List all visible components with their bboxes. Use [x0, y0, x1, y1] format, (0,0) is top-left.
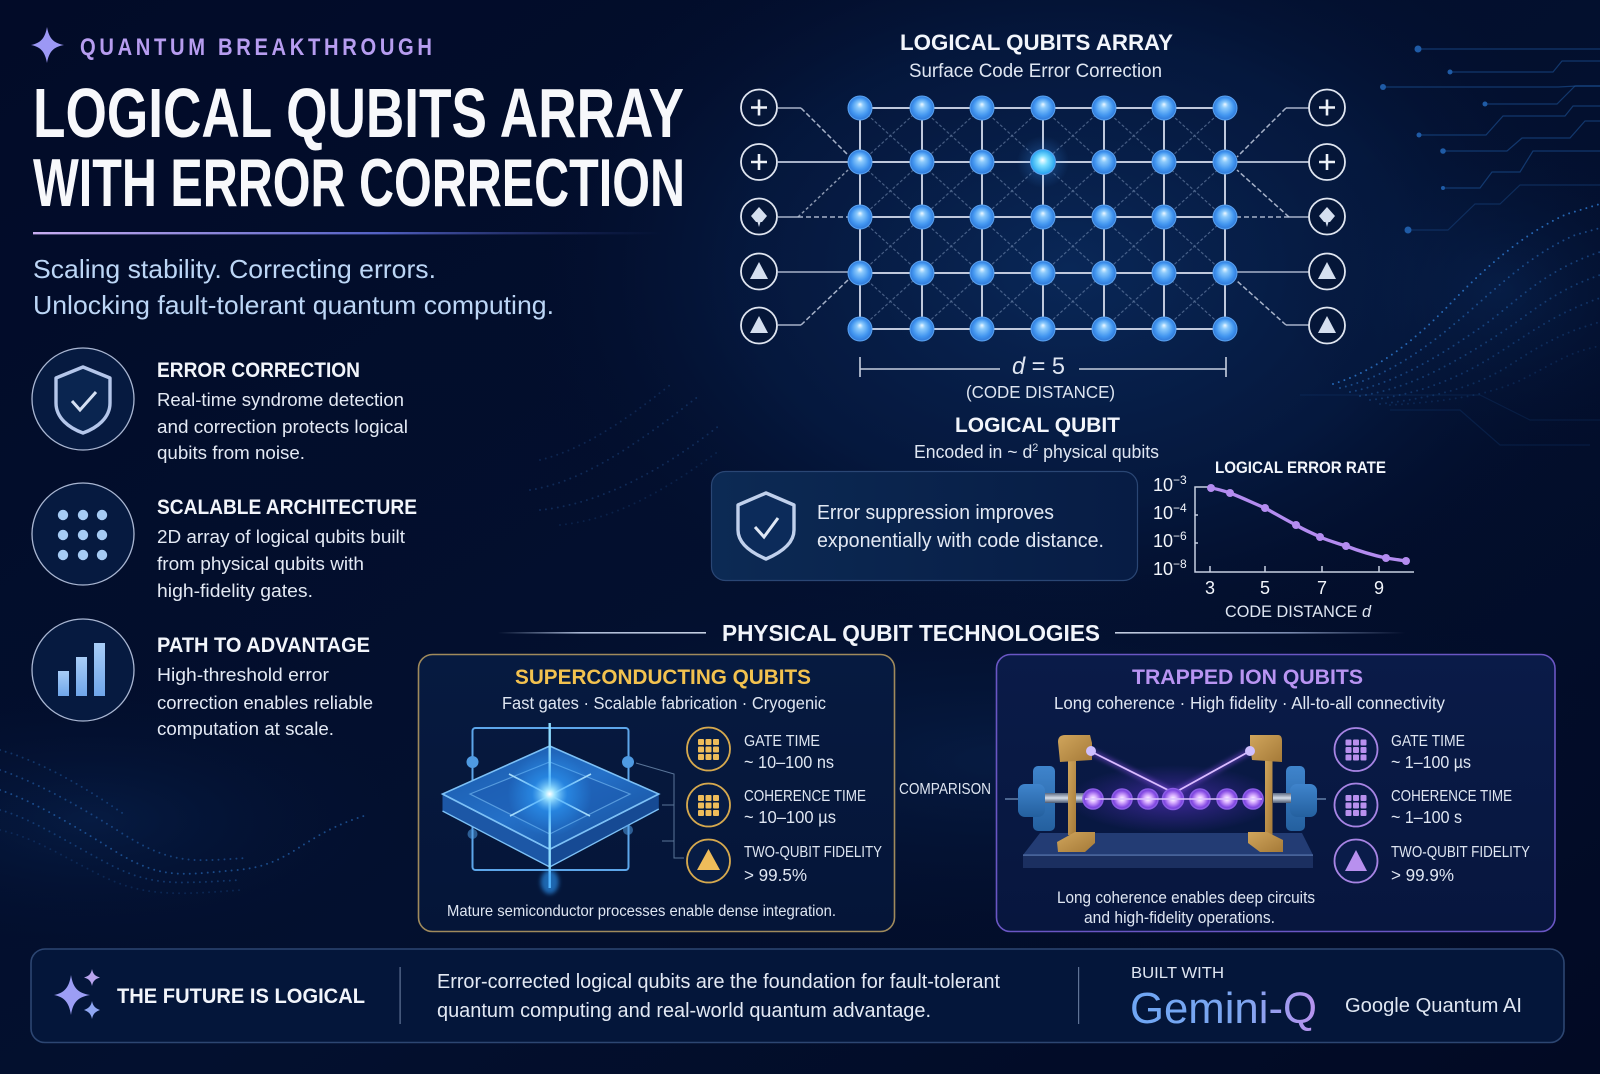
logical qubit heading	[914, 414, 1159, 462]
central glow	[1017, 136, 1069, 188]
connector lines	[636, 763, 684, 858]
main title: LOGICAL QUBITS ARRAY	[33, 74, 684, 152]
branding: BUILT WITH	[1131, 965, 1224, 982]
panel heading: Long coherence · High fidelity · All-to-all connectivity	[1054, 693, 1445, 713]
code distance bracket: d = 5	[1012, 353, 1065, 380]
title rule	[33, 232, 663, 234]
logical qubit heading: physical qubits	[1038, 442, 1159, 462]
blue end caps	[1018, 766, 1317, 831]
subtitle	[33, 254, 554, 320]
feature text: from physical qubits with	[157, 553, 364, 574]
base plate	[1023, 833, 1313, 855]
feature text: correction enables reliable	[157, 692, 373, 713]
stat: two-qubit fidelity: TWO-QUBIT FIDELITY	[744, 844, 882, 861]
callout: error suppression	[712, 472, 1138, 580]
y axis labels: −3	[1173, 473, 1187, 487]
icon: shield	[738, 493, 794, 559]
chart: logical error rate: LOGICAL ERROR RATE	[1215, 459, 1386, 477]
laser beams	[1092, 751, 1250, 793]
qubit lattice diagram	[741, 90, 1345, 344]
data points	[1207, 484, 1410, 565]
y axis labels: 10	[1153, 475, 1173, 495]
y axis labels: −4	[1173, 501, 1187, 515]
icon: bar chart in circle	[32, 619, 134, 721]
footer banner	[31, 949, 1564, 1042]
y axis labels: 10	[1153, 531, 1173, 551]
feature: path to advantage	[32, 619, 373, 739]
y axis labels: −6	[1173, 529, 1187, 543]
stat: gate time: GATE TIME	[744, 733, 820, 750]
subtitle: Unlocking fault-tolerant quantum computing.	[33, 290, 554, 320]
panel: trapped ion qubits	[996, 654, 1555, 932]
x axis labels: 3	[1205, 578, 1215, 598]
icon: sparkle star	[31, 27, 64, 63]
qubit nodes	[848, 96, 1237, 341]
stat: two-qubit fidelity	[687, 840, 882, 885]
side connectors	[778, 108, 1309, 325]
feature text	[157, 359, 408, 463]
comparison label: COMPARISON	[899, 781, 991, 798]
code distance bracket: (CODE DISTANCE)	[966, 382, 1115, 402]
y axis labels: −8	[1173, 557, 1187, 571]
curve	[1211, 488, 1406, 561]
stat: coherence time: ~ 1–100 s	[1391, 807, 1462, 827]
y axis labels	[1153, 473, 1187, 579]
left syndrome markers	[741, 90, 777, 344]
main title: WITH ERROR CORRECTION	[33, 145, 685, 221]
code distance bracket	[860, 353, 1226, 402]
panel heading: SUPERCONDUCTING QUBITS	[515, 666, 811, 689]
feature text: High-threshold error	[157, 664, 329, 685]
section heading: physical qubit technologies: PHYSICAL QUBIT TECHNOLOGIES	[722, 620, 1100, 646]
icon: sparkles	[54, 969, 100, 1019]
x axis labels	[1205, 578, 1384, 598]
feature: error correction	[32, 348, 408, 463]
array heading: LOGICAL QUBITS ARRAY	[900, 30, 1173, 55]
branding: Google Quantum AI	[1345, 995, 1522, 1017]
feature text: 2D array of logical qubits built	[157, 526, 405, 547]
stat: coherence time: COHERENCE TIME	[1391, 788, 1512, 805]
panel heading: TRAPPED ION QUBITS	[1132, 666, 1363, 689]
array heading: Surface Code Error Correction	[909, 61, 1162, 82]
stat: coherence time	[687, 784, 866, 827]
trapped ions	[1083, 788, 1263, 810]
stat: gate time: GATE TIME	[1391, 733, 1465, 750]
right syndrome markers	[1309, 90, 1345, 344]
eyebrow label: QUANTUM BREAKTHROUGH	[80, 33, 432, 60]
panel: superconducting qubits	[418, 654, 894, 932]
stat: gate time	[1334, 728, 1471, 772]
banner message	[437, 971, 1000, 1022]
feature text: computation at scale.	[157, 718, 334, 739]
panel heading	[502, 666, 826, 713]
main title	[33, 74, 685, 221]
eyebrow with star	[31, 27, 432, 63]
panel footnote: and high-fidelity operations.	[1084, 909, 1275, 927]
banner heading: THE FUTURE IS LOGICAL	[117, 985, 365, 1008]
panel footnote: Mature semiconductor processes enable dense integration.	[447, 903, 836, 920]
logical qubit heading: 2	[1032, 442, 1038, 454]
gold posts	[1057, 735, 1283, 852]
feature text: ERROR CORRECTION	[157, 359, 360, 382]
feature: scalable architecture	[32, 483, 417, 601]
chart: logical error rate	[1153, 459, 1414, 621]
ion glow	[1068, 765, 1278, 833]
callout text	[817, 501, 1104, 552]
feature text: SCALABLE ARCHITECTURE	[157, 496, 417, 519]
illustration: quantum chip	[442, 723, 659, 894]
feature text: PATH TO ADVANTAGE	[157, 634, 370, 657]
panel footnote: Long coherence enables deep circuits	[1057, 889, 1315, 907]
x axis labels: 7	[1317, 578, 1327, 598]
feature text	[157, 496, 417, 601]
feature text: and correction protects logical	[157, 416, 408, 437]
callout text: exponentially with code distance.	[817, 529, 1104, 552]
feature text: high-fidelity gates.	[157, 580, 313, 601]
stat: two-qubit fidelity: > 99.9%	[1391, 865, 1454, 885]
icon: dot grid in circle	[32, 483, 134, 585]
chart: logical error rate: CODE DISTANCE d	[1225, 603, 1372, 621]
y axis labels: 10	[1153, 503, 1173, 523]
x axis labels: 5	[1260, 578, 1270, 598]
stat: gate time	[687, 728, 834, 772]
callout text: Error suppression improves	[817, 501, 1054, 524]
feature text: qubits from noise.	[157, 442, 305, 463]
y axis labels: 10	[1153, 559, 1173, 579]
axes	[1195, 487, 1414, 572]
illustration: ion trap	[1005, 735, 1326, 868]
x axis labels: 9	[1374, 578, 1384, 598]
panel heading: Fast gates · Scalable fabrication · Cryogenic	[502, 693, 826, 713]
banner message: quantum computing and real-world quantum advantage.	[437, 1000, 931, 1022]
branding	[1130, 965, 1522, 1033]
subtitle: Scaling stability. Correcting errors.	[33, 254, 436, 284]
dot waves	[0, 204, 1600, 893]
stat: coherence time	[1334, 784, 1512, 827]
diagonal stabilizer links	[860, 108, 1225, 329]
stat: coherence time: ~ 10–100 µs	[744, 807, 836, 827]
branding: Gemini-Q	[1130, 984, 1317, 1033]
stat: gate time: ~ 10–100 ns	[744, 752, 834, 772]
panel footnote	[1057, 889, 1315, 927]
array heading	[900, 30, 1173, 82]
stat: two-qubit fidelity: TWO-QUBIT FIDELITY	[1391, 844, 1530, 861]
panel heading	[1054, 666, 1445, 713]
logical qubit heading: Encoded in ~ d	[914, 442, 1035, 462]
stat: two-qubit fidelity	[1334, 840, 1530, 885]
circuit traces	[1300, 49, 1600, 445]
banner message: Error-corrected logical qubits are the foundation for fault-tolerant	[437, 971, 1000, 993]
stat: coherence time: COHERENCE TIME	[744, 788, 866, 805]
feature text: Real-time syndrome detection	[157, 389, 404, 410]
grid lines	[860, 108, 1225, 329]
icon: shield in circle	[32, 348, 134, 450]
stat: gate time: ~ 1–100 µs	[1391, 752, 1471, 772]
stat: two-qubit fidelity: > 99.5%	[744, 865, 807, 885]
logical qubit heading: LOGICAL QUBIT	[955, 414, 1120, 437]
trap rod	[1005, 793, 1326, 803]
feature text	[157, 634, 373, 739]
